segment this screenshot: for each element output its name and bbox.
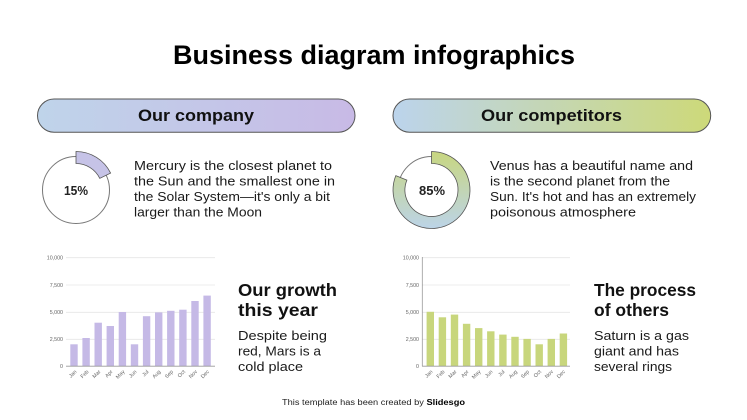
text: Mars: red, Mars is a [238,344,322,358]
text: Mars: cold place [238,359,303,374]
bar chart: growth: Jun [128,369,138,379]
bar chart: process: 2,500 [406,337,419,343]
title: Business diagram infographics [173,40,575,70]
bar chart: process: 10,000 [403,256,419,262]
heading: our growth this year: this year [238,300,318,320]
footer credit: This template has been created by Slidesgo [282,398,465,407]
bar chart: process: Aug [508,369,519,380]
description: Mercury: the Solar System—it's only a bit [134,189,330,204]
panel: our competitors [393,99,711,380]
bar chart: process: Sep [520,369,531,380]
bar chart: growth: Mar [92,369,103,380]
bar chart: process: 7,500 [406,283,419,289]
heading: the process of others [594,280,696,320]
text: Mars [238,328,327,374]
description: Venus: Venus has a beautiful name and [490,158,693,173]
bar chart: growth: Nov [188,369,199,380]
heading pill: our company: Our company [138,106,255,125]
bar chart: process: Mar [448,369,459,380]
bar chart: growth: Aug [151,369,162,380]
description: Venus: poisonous atmosphere [490,204,636,220]
description: Mercury: Mercury is the closest planet to [134,158,332,173]
text: Saturn: giant and has [594,344,679,358]
donut chart: 15% [42,152,111,224]
bar chart: growth: 0 [60,364,63,370]
bar chart: growth: Jul [141,369,150,378]
bar chart: process: Jun [484,369,494,379]
bar chart: growth: May [115,369,127,380]
bar chart: growth: 2,500 [50,337,63,343]
description: Venus: Sun. It's hot and has an extremely [490,189,697,204]
bar chart: growth: Oct [177,369,187,379]
bar chart: growth: Dec [200,369,211,380]
bar chart: growth: Jan [68,369,78,379]
heading pill: our competitors [393,99,711,132]
bar chart: process: 5,000 [406,310,419,316]
heading: our growth this year [238,280,337,320]
heading pill: our competitors: Our competitors [481,106,622,125]
heading pill: our company [38,99,355,132]
text: Saturn [594,328,689,374]
description: Mercury [134,158,335,220]
heading: the process of others: of others [594,300,669,320]
bar chart: process: Oct [533,369,543,379]
bar chart: process: May [471,369,483,380]
bar chart: process [403,256,570,380]
bar chart: process: 0 [416,364,419,370]
bar chart: process: Jul [497,369,506,378]
bar chart: growth [47,256,215,380]
bar chart: process: Feb [436,369,446,380]
bar chart: process: Dec [556,369,567,380]
bar chart: process: Nov [544,369,555,380]
bar chart: growth: 10,000 [47,256,63,262]
text: Mars: Despite being [238,328,327,343]
description: Mercury: larger than the Moon [134,204,262,220]
bar chart: process: Apr [460,369,471,379]
bar chart: growth: Apr [104,369,115,379]
description: Venus: is the second planet from the [490,174,670,188]
description: Venus [490,158,697,220]
bar chart: growth: 7,500 [50,283,63,289]
bar chart: growth: Feb [80,369,90,380]
bar chart: growth: 5,000 [50,310,63,316]
panel: our company [38,99,355,380]
donut chart: 85% [393,152,470,228]
bar chart: growth: Sep [164,369,175,380]
text: Saturn: Saturn is a gas [594,328,689,343]
bar chart: process: Jan [424,369,434,379]
description: Mercury: the Sun and the smallest one in [134,174,335,188]
text: Saturn: several rings [594,359,672,374]
donut chart: 85%: 85% [419,184,445,198]
heading: the process of others: The process [594,280,696,300]
heading: our growth this year: Our growth [238,280,337,300]
donut chart: 15%: 15% [64,184,88,198]
